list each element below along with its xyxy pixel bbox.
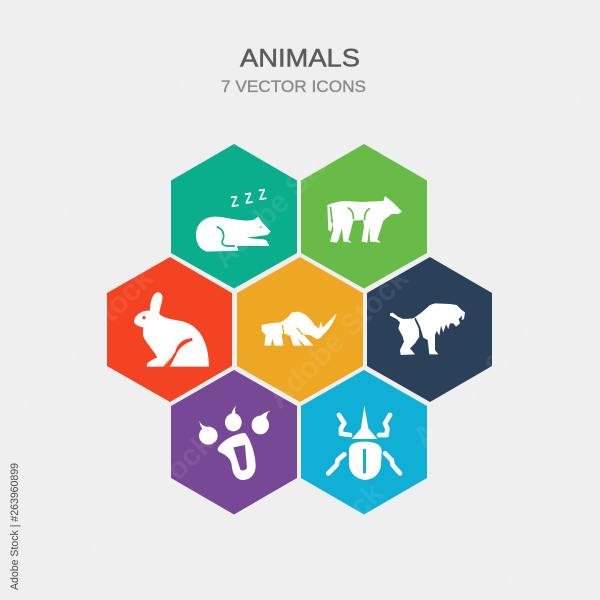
watermark: Adobe Stock [407, 302, 560, 455]
stock id label: Adobe Stock | #263960899 [9, 463, 21, 590]
icon: sabertooth cat [390, 303, 465, 355]
watermark: Adobe Stock [262, 262, 415, 415]
panel: paw print [171, 370, 297, 514]
icon: calf [327, 196, 402, 243]
icon: rhino [262, 312, 337, 346]
hexagon: cyan [301, 370, 427, 514]
icon: rabbit [134, 292, 209, 367]
hexagon: purple [171, 370, 297, 514]
panel: sabertooth cat [367, 257, 492, 402]
icon: sleeping bear with zzz [196, 186, 271, 252]
icon: sleeping bear with zzz: Z [257, 186, 267, 204]
hexagon: green teal [171, 144, 297, 288]
panel: rhino [237, 257, 363, 402]
watermark: Adobe Stock [207, 122, 360, 275]
watermark: Adobe Stock [7, 262, 160, 415]
panel: rabbit [107, 257, 232, 402]
title: ANIMALS [240, 44, 360, 72]
icon: paw print [199, 406, 270, 480]
icon: sleeping bear with zzz: Z [230, 193, 240, 211]
hexagon: green [301, 144, 427, 288]
panel: rhinoceros beetle [301, 370, 427, 514]
subtitle: 7 VECTOR ICONS [221, 78, 366, 96]
panel: sleeping bear [171, 144, 297, 288]
watermark: Adobe Stock [442, 87, 595, 240]
icon: rhinoceros beetle [328, 406, 400, 480]
watermark: Adobe Stock [67, 427, 220, 580]
hexagon: amber [237, 257, 363, 402]
panel: calf [301, 144, 427, 288]
watermark: Adobe Stock [47, 72, 200, 225]
hexagon: navy [367, 257, 492, 402]
hexagon: red orange [107, 257, 232, 402]
icon: sleeping bear with zzz: Z [244, 190, 254, 208]
